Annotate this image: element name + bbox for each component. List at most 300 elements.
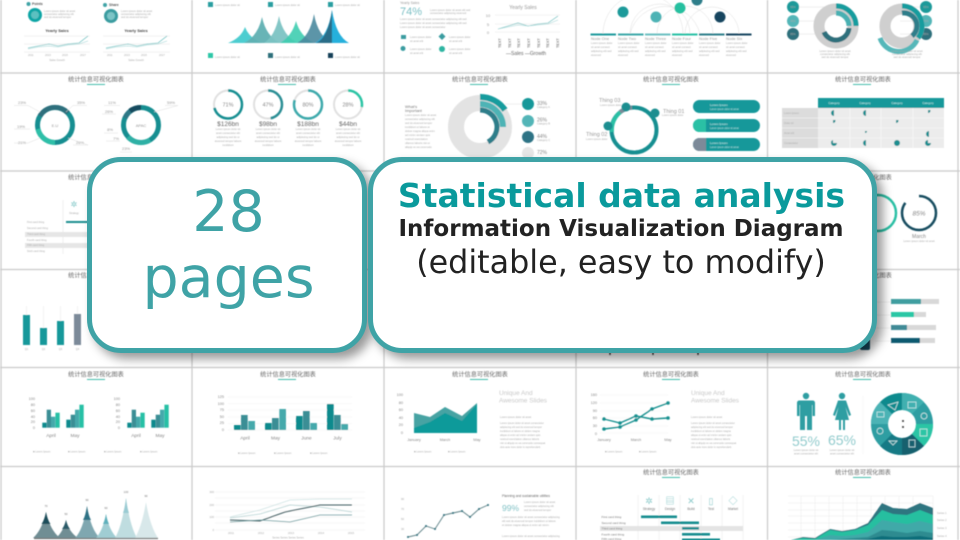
slide: twin donuts: 45% [790,19,796,23]
subtitle: Information Visualization Diagram [398,216,844,242]
slide: people and icon wheel: Lorem ipsum dolor sit [794,448,819,452]
slide: arcs with bubbles: eiusmod [645,53,655,57]
slide: sales icons with line charts: 2017 [80,53,86,57]
slide: grouped bar chart: ■ Lorem Ipsum [310,451,327,455]
slide: twin bar charts: 40 [31,415,35,419]
slide: category table [782,76,944,148]
slide: line chart with text: 120 [591,401,597,405]
slide: people and icon wheel: 55% [792,433,820,449]
slide: partly hidden gantt: ✲ [71,200,78,209]
slide: gantt chart: Strategy [643,507,655,511]
slide: sales icons with line charts: 2013 [45,53,51,57]
slide: triangle peaks: 60 [104,506,108,510]
slide: sales icons with line charts: 2015 [62,53,68,57]
slide: regional donuts: 26% [76,140,84,145]
slide: line chart with text: 统计信息可视化图表 [643,370,699,378]
slide: mountain chart: Lorem ipsum dolor sit [275,3,300,7]
slide: regional donuts: 11% [108,100,116,105]
slide: yearly sales 74 percent: sit amet elit [410,51,423,55]
slide: area chart with text: 60 [399,408,403,412]
slide: line chart with text: ■ Lorem Ipsum [605,450,622,454]
slide: partly hidden bar chart: Q4 [76,347,80,351]
slide: multi-line chart: 2013 [288,531,295,535]
slide: triangle peaks [33,490,158,538]
slide: sales icons with line charts: 2017 [159,53,165,57]
slide: progress rings: Lorem ipsum dolor sit [296,127,321,131]
slide: twin donuts: 45% [923,19,929,23]
slide: twin donuts: 65% [923,5,929,9]
slide: area chart with text: adipiscing elit sed do eiusmod tempor [500,426,542,429]
slide: category table: Consectetur [784,141,798,145]
slide: sales icons with line charts: Sales Growth [49,58,65,62]
slide: triangle peaks: 90 [144,494,148,498]
slide: multi-line chart: 2014 [318,531,325,535]
slide: multi-line chart: 2011 [228,531,234,535]
slide: people and icon wheel [792,370,933,456]
slide: arcs with bubbles: eiusmod [672,53,682,57]
slide: regional donuts: 8% [107,127,113,132]
slide: line chart with text: duis aute irure dolor in reprehenderit [691,446,732,449]
slide: grouped bar chart: 100 [218,402,224,406]
slide: hidden gantt ticks [610,347,698,355]
slide: mountain chart: Lorem ipsum dolor sit [215,55,240,59]
slide: progress rings: $44bn [339,121,357,128]
slide: twin donuts: sed do eiusmod tempor [821,55,849,59]
slide: ring with things and pills: Thing 02 [586,132,607,138]
slide: grouped bar chart: May [271,436,281,442]
slide: sales icons with line charts: 2011 [28,53,34,57]
slide: progress rings: 统计信息可视化图表 [260,76,316,84]
slide: arcs with bubbles: Node Six [726,36,742,41]
slide: partly hidden gantt: Second card thing [27,226,48,230]
slide: line chart with text: 90 [593,409,597,413]
slide: regional donuts: 23% [18,100,26,105]
slide: what's important donut: consectetur adipiscing elit [405,117,435,121]
slide: yearly sales 74 percent: TEXT [546,38,550,48]
slide: twin donuts: 65% [790,5,796,9]
panel: title [368,157,877,353]
slide: progress rings: amet consectetur elit [336,131,360,135]
slide: what's important donut: 统计信息可视化图表 [452,76,508,84]
slide: area chart with text: 20 [399,423,403,427]
slide: arcs with bubbles: adipiscing elit sed [699,49,720,53]
slide: yearly sales 74 percent: sit amet elit [449,39,462,43]
slide: what's important donut: Lorem ipsum dolor sit amet [405,113,437,117]
slide: what's important donut: ullamco laboris nisi ut [405,141,430,145]
slide: 85 percent ring: 85% [912,210,926,218]
slide: grouped bar chart: ■ Lorem Ipsum [274,451,291,455]
slide: twin bar charts: 60 [31,409,35,413]
slide: area chart with text: nisi ut aliquip ex ea commodo consequat [500,442,545,445]
slide: twin donuts: sed do eiusmod tempor [893,55,921,59]
slide: sales icons with line charts: Yearly Sales [45,28,69,33]
slide: category table: Amet elit [784,131,794,135]
slide: grouped bar chart: 25 [220,421,224,425]
slide: area chart with text: ■ Lorem Ipsum [448,450,465,454]
slide: gantt chart: ▤ [665,496,675,506]
slide: partly hidden gantt: 统计信息可视化图表 [68,174,124,182]
slide: progress rings: amet consectetur elit [256,131,280,135]
slide: arcs with bubbles: eiusmod [699,53,709,57]
slide: sales icons with line charts [24,2,170,62]
slide: grouped bar chart: April [240,436,250,442]
slide: progress rings: adipiscing sed do ut [257,135,280,139]
slide: yearly sales 74 percent: TEXT [517,38,521,48]
slide: area chart with text: March [440,438,450,442]
slide: mountain chart: Lorem ipsum dolor sit [275,55,300,59]
slide: twin bar charts: April [46,433,56,439]
slide: twin bar charts: 80 [31,403,35,407]
icon: woman [833,393,851,430]
slide: partly hidden gantt: Fourth card thing [27,238,47,242]
slide: what's important donut: sed do eiusmod tempor [405,121,432,125]
slide: category table: Category [922,101,934,105]
slide: yearly sales 74 percent: Yearly Sales [400,1,420,5]
slide: what's important donut: Category B [537,122,550,126]
slide: dotted line chart with 99 percent: Planning and sustainable utilities [502,494,550,498]
slide: sales icons with line charts: sed do eiusmod tempor [44,15,71,19]
slide: line chart with text: January [597,438,611,442]
slide: progress rings: incididunt [263,143,274,147]
slide: area chart with text: Unique And [499,390,533,397]
slide: area chart with text: May [473,438,481,442]
slide: arcs with bubbles: Lorem ipsum dolor [699,41,721,45]
slide: twin bar charts: 0 [33,426,35,430]
icon: man [797,393,815,430]
slide: dotted line chart with 99 percent [401,494,560,538]
slide: yearly sales 74 percent: TEXT [508,38,512,48]
slide: multi-line chart: 100 [209,515,214,519]
slide: ring with things and pills: Lorem ipsum dolor [662,113,684,117]
slide: progress rings: incididunt [343,143,354,147]
slide: dotted line chart with 99 percent: 50 [401,517,405,521]
slide: what's important donut: nostrud exercitation [405,137,428,141]
panel: page count [87,157,367,353]
slide: 85 percent ring: 统计信息可视化图表 [836,174,892,182]
slide: mountain chart: Lorem ipsum dolor sit [335,3,360,7]
slide: regional donuts: 23% [122,146,130,151]
slide: arcs with bubbles: Node Three [645,36,667,41]
slide: partly hidden horizontal bars [836,272,939,350]
slide: stacked area chart: Series 2 [937,518,947,522]
slide: sales icons with line charts: 2013 [124,53,130,57]
slide: what's important donut: 72% [537,150,548,156]
slide: stacked area chart: 统计信息可视化图表 [835,468,891,476]
slide: area chart with text [397,370,548,454]
slide: progress rings [214,76,362,147]
slide: category table: Lorem ipsum [784,111,799,115]
slide: yearly sales 74 percent: consectetur adipiscing eiusmod [430,11,467,15]
slide: gantt chart: 统计信息可视化图表 [643,468,699,476]
slide: ring with things and pills [586,76,760,152]
slide: yearly sales 74 percent: Lorem ipsum dolor [410,35,432,39]
slide: yearly sales 74 percent: TEXT [527,38,531,48]
slide: sales icons with line charts: Sales Growth [128,58,144,62]
slide: twin bar charts: 40 [116,415,120,419]
slide: arcs with bubbles: sit amet consect [645,45,664,49]
slide: what's important donut: Category C [537,138,550,142]
slide: twin bar charts: 20 [116,420,120,424]
slide: progress rings: eiusmod tempor labore [255,139,282,143]
slide: arcs with bubbles: eiusmod [726,53,736,57]
slide: gantt chart: ✲ [645,496,653,506]
slide: regional donuts: E.U [52,123,58,128]
slide: twin bar charts: ■ Lorem Ipsum [33,450,50,454]
slide: gantt chart: First card thing [602,515,622,519]
slide: line chart with text: 0 [595,432,597,436]
slide: twin bar charts: 20 [31,420,35,424]
slide: dotted line chart with 99 percent: Lorem ipsum dolor sit amet [524,500,556,504]
slide: dotted line chart with 99 percent: 30 [401,527,405,531]
slide: regional donuts: 35% [77,100,85,105]
slide: dotted line chart with 99 percent: et dolore magna aliqua ut enim ad minim [502,523,549,527]
slide: multi-line chart: 0 [212,528,214,532]
slide: gantt chart: Build [687,507,695,511]
slide: multi-line chart: 2015 [348,531,355,535]
slide: twin donuts: 85% [923,32,929,36]
slide: regional donuts: 7% [113,136,119,141]
slide: multi-line chart [209,490,365,540]
slide: line chart with text: Unique And [691,390,725,397]
slide: line chart with text: May [664,438,672,442]
slide: progress rings: adipiscing sed do ut [337,135,360,139]
slide: gantt chart: Design [665,507,675,511]
slide: yearly sales 74 percent [400,1,560,57]
slide: arcs with bubbles: sit amet consect [699,45,718,49]
slide: yearly sales 74 percent: Yearly Sales [509,5,537,11]
slide: category table: Category [828,101,840,105]
main title: Statistical data analysis [398,176,845,215]
slide: ring with things and pills: Lorem ipsum dolor sit amet [710,108,739,111]
slide: yearly sales 74 percent: sit amet elit [410,39,423,43]
slide: twin bar charts [29,370,169,454]
slide: grouped bar chart: 125 [218,395,224,399]
slide: sales icons with line charts: Yearly Sales [124,28,148,33]
slide: progress rings: adipiscing sed do ut [217,135,240,139]
slide: mountain chart [208,2,360,59]
slide: twin bar charts: 100 [29,397,35,401]
slide: category table: Category [891,101,903,105]
slide: arcs with bubbles: Lorem ipsum dolor [726,41,748,45]
note: (editable, easy to modify) [416,244,826,281]
slide: gantt chart: Test [708,507,714,511]
slide: dotted line chart with 99 percent: consectetur adipiscing elit [524,504,554,508]
slide: progress rings: 71% [222,102,234,108]
slide: area chart with text: January [407,438,421,442]
slide: yearly sales 74 percent: 74% [400,6,422,18]
slide: partly hidden bar chart: Q1 [25,347,29,351]
slide: progress rings: incididunt [303,143,314,147]
slide: line chart with text: nostrud exercitation ullamco laboris [691,438,731,441]
slide: progress rings: incididunt [223,143,234,147]
slide: triangle peaks: 50 [64,512,68,516]
slide: arcs with bubbles: Lorem ipsum dolor [672,41,694,45]
slide: regional donuts: 19% [17,124,25,129]
slide: yearly sales 74 percent: Lorem ipsum dolor sit amet consectetur adipiscing elit sed [400,17,467,21]
slide: area chart with text: aliqua ut enim ad minim veniam quis [500,434,541,437]
slide: mountain chart: Lorem ipsum dolor sit [335,55,360,59]
slide: line chart with text: Lorem ipsum dolor sit amet consectetur [691,422,735,425]
slide: partly hidden bar chart [23,272,124,351]
slide: progress rings: $188bn [297,121,319,128]
slide: twin bar charts: May [155,433,165,439]
slide: twin donuts: consectetur adipiscing elit [892,52,922,56]
slide: progress rings: 47% [262,102,274,108]
slide: twin bar charts: 统计信息可视化图表 [68,370,124,378]
slide: sales icons with line charts: Points [32,2,43,6]
slide: yearly sales 74 percent: TEXT [556,38,560,48]
slide: sales icons with line charts: Lorem ipsum dolor sit amet [121,9,153,13]
slide: twin bar charts: 60 [116,409,120,413]
slide: progress rings: 80% [302,102,314,108]
slide: what's important donut: Important [405,108,423,113]
slide: sales icons with line charts: sed do eiusmod tempor [121,15,148,19]
slide: gantt chart: Second card thing [602,521,626,525]
slide: area chart with text: nostrud exercitation ullamco laboris [500,438,540,441]
slide: ring with things and pills: Lorem ipsum dolor sit amet [710,146,739,149]
slide: people and icon wheel: 65% [828,432,856,448]
slide: twin donuts [787,1,932,59]
slide: stacked area chart: Series 4 [937,534,947,538]
slide: arcs with bubbles: adipiscing elit sed [726,49,747,53]
page count label: pages [142,245,315,311]
slide: multi-line chart: Series Series Series Series [272,536,304,540]
slide: line chart with text: Lorem ipsum dolor sit amet [691,415,723,419]
slide: yearly sales 74 percent: sit amet elit [449,51,462,55]
slide: twin bar charts: May [70,433,80,439]
slide: ring with things and pills: Lorem Ipsum [710,122,728,126]
slide: multi-line chart: 200 [209,503,214,507]
slide: progress rings: Lorem ipsum dolor sit [336,127,361,131]
slide: partly hidden bar chart: Q3 [59,347,63,351]
slide: what's important donut: incididunt ut labore et [405,125,430,129]
slide: line chart with text: March [631,438,641,442]
slide: twin bar charts: 80 [116,403,120,407]
slide: grouped bar chart: 75 [220,408,224,412]
slide: regional donuts [14,76,178,152]
slide: progress rings: Lorem ipsum dolor sit [256,127,281,131]
slide: grouped bar chart: 50 [220,415,224,419]
slide: partly hidden gantt: Sixth card thing [27,249,45,253]
slide: partly hidden horizontal bars: 统计信息可视化图表 [836,272,892,280]
slide: progress rings: amet consectetur elit [296,131,320,135]
slide: regional donuts: 59% [167,100,175,105]
slide: dotted line chart with 99 percent: elit sed do eiusmod tempor incididunt ut labore [502,519,556,523]
slide: ring with things and pills: 统计信息可视化图表 [643,76,699,84]
slide: area chart with text: Lorem ipsum dolor sit amet consectetur [500,422,544,425]
slide: progress rings: $126bn [217,121,239,128]
slide: progress rings: amet consectetur elit [216,131,240,135]
slide: triangle peaks: 70 [44,504,48,508]
slide: yearly sales 74 percent: TEXT [498,38,502,48]
slide: arcs with bubbles: adipiscing elit sed [672,49,693,53]
slide: gantt chart: Third card thing [602,526,623,530]
slide: partly hidden gantt: Fifth card thing [27,243,45,247]
slide: partly hidden gantt: Strategy [69,211,80,215]
slide: arcs with bubbles: sit amet consect [591,45,610,49]
slide: line chart with text: adipiscing elit sed do eiusmod tempor [691,426,733,429]
slide: grouped bar chart: 统计信息可视化图表 [260,370,316,378]
slide: twin donuts: consectetur adipiscing elit [820,52,850,56]
slide: yearly sales 74 percent: Lorem ipsum dolor sit amet elit sed [430,8,471,12]
slide: twin donuts: Lorem ipsum dolor sit amet [819,49,851,53]
slide: multi-line chart: 2012 [258,531,265,535]
slide: gantt chart: ◇ [728,496,738,506]
slide: ring with things and pills: Lorem ipsum dolor [600,103,622,107]
slide: ring with things and pills: Lorem Ipsum [710,103,728,107]
slide: stacked area chart: Series 1 [937,511,947,515]
slide: progress rings: eiusmod tempor labore [295,139,322,143]
slide: ring with things and pills: Thing 03 [599,98,620,104]
slide: line chart with text: ■ Lorem Ipsum [639,450,656,454]
slide: area chart with text: 0 [401,431,403,435]
slide: line chart with text: Awesome Slides [691,398,740,404]
slide: triangle peaks: 90 [85,498,89,502]
slide: yearly sales 74 percent: Lorem ipsum dolor [449,35,471,39]
slide: area chart with text: incididunt ut labore et dolore magna [500,430,540,433]
slide: dotted line chart with 99 percent: sed do eiusmod tempor [524,508,551,512]
slide: ring with things and pills: Lorem ipsum dolor sit amet [710,127,739,130]
slide: gantt chart: ✕ [687,496,695,506]
slide: what's important donut: 26% [537,118,548,124]
slide: partly hidden gantt [25,174,124,254]
slide: partly hidden bar chart: 统计信息可视化图表 [68,272,124,280]
slide: stacked area chart [788,468,947,540]
slide: what's important donut [405,76,550,159]
slide: dotted line chart with 99 percent: 99% [502,503,519,513]
slide: sales icons with line charts: consectetur adipiscing elit [121,12,151,16]
slide: dotted line chart with 99 percent: 70 [401,507,405,511]
slide: arcs with bubbles: Lorem ipsum dolor [591,41,613,45]
slide: dotted line chart with 99 percent: Lorem ipsum dolor sit amet consectetur adipiscing [502,534,560,538]
slide: category table: Category [859,101,871,105]
slide: category table: Dolor sit [784,121,794,125]
slide: gantt chart: ▯ [709,496,714,506]
slide: area chart with text: Awesome Slides [499,398,548,404]
slide: grouped bar chart: ■ Lorem Ipsum [238,451,255,455]
slide: stacked area chart: Series 3 [937,526,947,530]
slide: twin bar charts: 0 [118,426,120,430]
slide: sales icons with line charts: Share [109,3,119,7]
slide: mountain chart: Lorem ipsum dolor sit [215,3,240,7]
slide: area chart with text: 80 [399,401,403,405]
slide: regional donuts: 21% [18,140,26,145]
slide: partly hidden gantt: First card thing [27,220,45,224]
slide: area chart with text: ■ Lorem Ipsum [414,450,431,454]
slide: ring with things and pills: Thing 01 [663,109,684,115]
slide: gantt chart: Market [728,507,738,511]
slide: what's important donut: 33% [537,101,548,107]
slide: gantt chart: Fourth card thing [602,532,625,536]
slide: arcs with bubbles: Node Two [618,36,637,41]
slide: yearly sales 74 percent: Lorem ipsum dolor [410,47,432,51]
slide: line chart with text: 30 [593,424,597,428]
slide: area chart with text: 统计信息可视化图表 [452,370,508,378]
slide: arcs with bubbles: Lorem ipsum dolor [645,41,667,45]
slide: progress rings: eiusmod tempor labore [335,139,362,143]
slide: people and icon wheel: Lorem ipsum dolor sit [830,448,855,452]
slide: twin bar charts: April [131,433,141,439]
slide: dotted line chart with 99 percent: 90 [401,497,405,501]
slide: dotted line chart with 99 percent: Lorem ipsum dolor sit amet consectetur adipiscing [502,515,560,519]
slide: arcs with bubbles [590,0,752,57]
slide: what's important donut: 44% [537,134,548,140]
slide: triangle peaks: 100 [124,490,129,494]
slide: regional donuts: 统计信息可视化图表 [68,76,124,84]
slide: 85 percent ring: March [912,234,926,240]
slide: sales icons with line charts: Lorem ipsum dolor sit amet [44,9,76,13]
slide: arcs with bubbles: sit amet consect [618,45,637,49]
